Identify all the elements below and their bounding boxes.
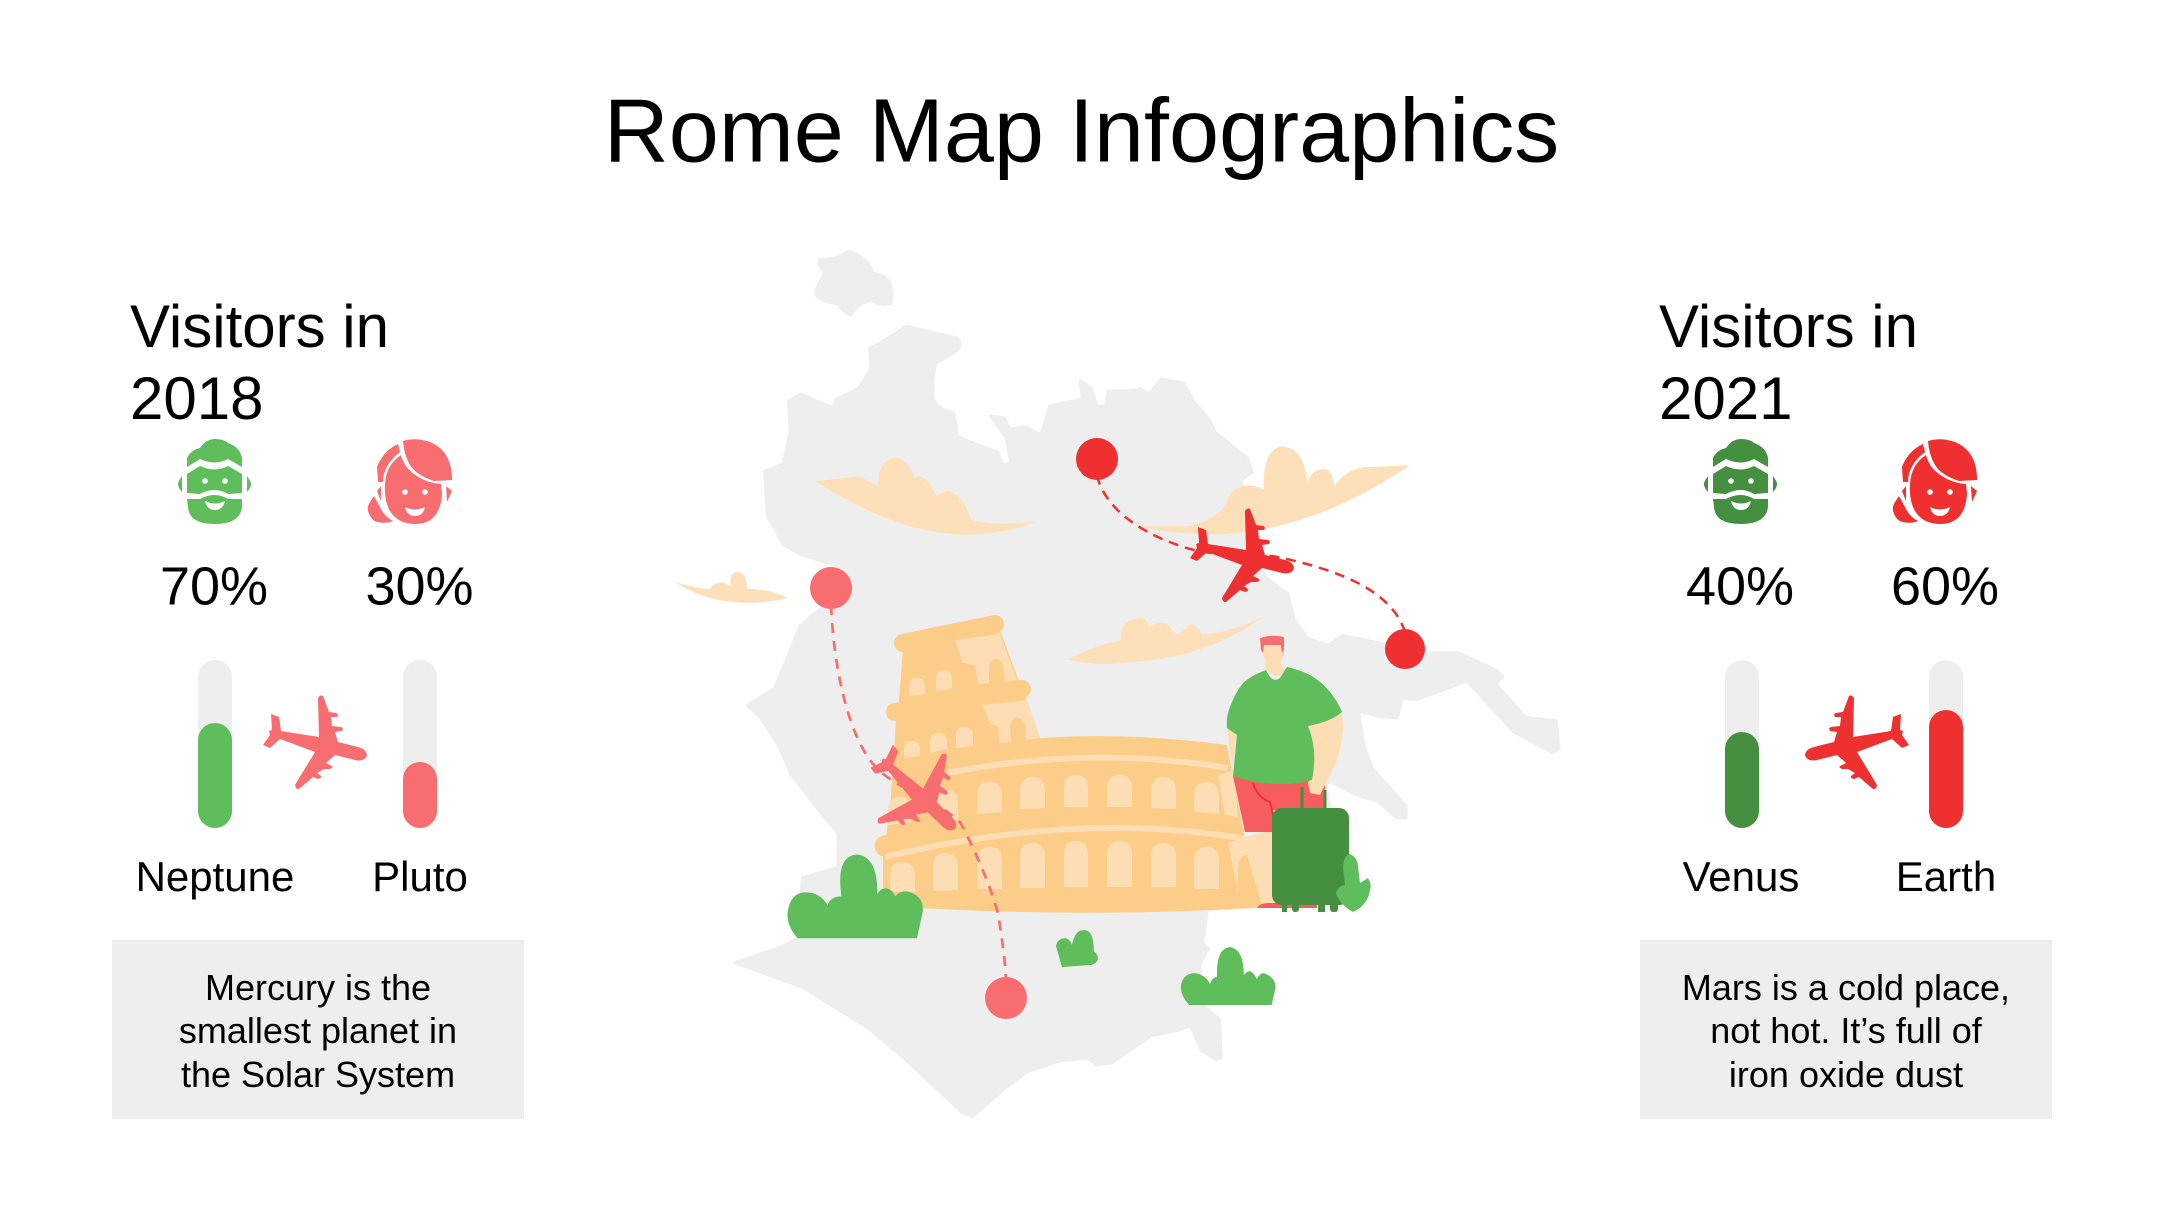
label: Earth: Earth xyxy=(1896,853,1996,900)
label: Pluto: Pluto xyxy=(372,853,468,900)
map: island xyxy=(814,250,894,317)
pin: red north xyxy=(1076,438,1118,480)
light wall panels xyxy=(1218,770,1276,905)
label: Venus: Venus xyxy=(1683,853,1799,900)
map and clouds xyxy=(675,250,1559,1116)
icon: woman face red xyxy=(1893,439,1977,524)
bar: Earth 60% xyxy=(1929,660,1963,828)
arm left xyxy=(1227,728,1237,767)
arm right xyxy=(1308,713,1343,795)
colosseum xyxy=(883,624,1276,913)
pin: pink west xyxy=(810,567,852,609)
panel: visitors in 2021 xyxy=(1640,293,2052,1119)
panel: visitors in 2018 xyxy=(112,293,524,1119)
callout: Mercury xyxy=(112,940,524,1119)
cloud 4 xyxy=(1068,617,1263,664)
shirt xyxy=(1227,667,1342,784)
callout: Mercury: the Solar System xyxy=(181,1054,455,1095)
cloud 2 xyxy=(1135,446,1410,534)
arches lower row xyxy=(890,841,1219,892)
traveller xyxy=(1227,636,1371,912)
callout: Mars xyxy=(1640,940,2052,1119)
value: 70%: 70% xyxy=(160,556,268,616)
shorts seam xyxy=(1253,783,1273,815)
map: mainland xyxy=(736,327,1559,1116)
route: red dashed xyxy=(1097,475,1405,632)
pin: pink south xyxy=(985,977,1027,1019)
label: Neptune: Neptune xyxy=(136,853,294,900)
pin: red east xyxy=(1385,629,1425,669)
icon: airplane red xyxy=(1805,695,1909,789)
heading: visitors in 2018: 2018 xyxy=(130,365,263,432)
icon: woman face pink xyxy=(368,439,452,524)
callout: Mercury: Mercury is the xyxy=(205,967,431,1008)
heading: visitors in 2021: Visitors in xyxy=(1659,293,1918,360)
callout: Mars: iron oxide dust xyxy=(1729,1054,1963,1095)
value: 40%: 40% xyxy=(1686,556,1794,616)
arcade bands xyxy=(885,758,1245,857)
arches upper row xyxy=(888,775,1219,825)
hair xyxy=(1260,636,1284,653)
neck and head xyxy=(1262,645,1287,676)
suitcase xyxy=(1272,808,1349,912)
tower highlights xyxy=(904,634,1040,758)
callout: Mars: not hot. It’s full of xyxy=(1710,1010,1983,1051)
route: pink dashed xyxy=(831,605,1006,980)
leaf small xyxy=(1056,930,1098,967)
cloud 3 xyxy=(675,572,788,603)
shorts xyxy=(1233,776,1326,832)
heading: visitors in 2021: 2021 xyxy=(1659,365,1792,432)
suitcase handle xyxy=(1302,787,1325,810)
bar: Venus 40% xyxy=(1725,660,1759,828)
value: 30%: 30% xyxy=(365,556,474,616)
airplane: red over map xyxy=(1190,508,1294,602)
colosseum body xyxy=(883,630,1265,913)
icon: man face dark green xyxy=(1704,439,1777,524)
tower slabs xyxy=(885,624,1022,846)
cloud 1 xyxy=(816,457,1038,535)
callout: Mars: Mars is a cold place, xyxy=(1682,967,2010,1008)
bush large xyxy=(788,854,923,938)
heading: visitors in 2018: Visitors in xyxy=(130,293,389,360)
shoe xyxy=(1257,903,1317,908)
map illustration xyxy=(675,250,1559,1116)
bush small xyxy=(1181,947,1276,1005)
airplane: pink on colosseum xyxy=(848,725,985,858)
title: Rome Map Infographics xyxy=(604,82,1559,182)
icon: man face green xyxy=(178,439,251,524)
bar: Neptune 70% xyxy=(198,660,232,828)
value: 60%: 60% xyxy=(1891,556,1999,616)
bar: Pluto 30% xyxy=(403,660,437,828)
bushes xyxy=(788,854,1276,1005)
bush by suitcase xyxy=(1336,854,1371,912)
icon: airplane pink xyxy=(263,695,367,789)
callout: Mercury: smallest planet in xyxy=(179,1010,457,1051)
